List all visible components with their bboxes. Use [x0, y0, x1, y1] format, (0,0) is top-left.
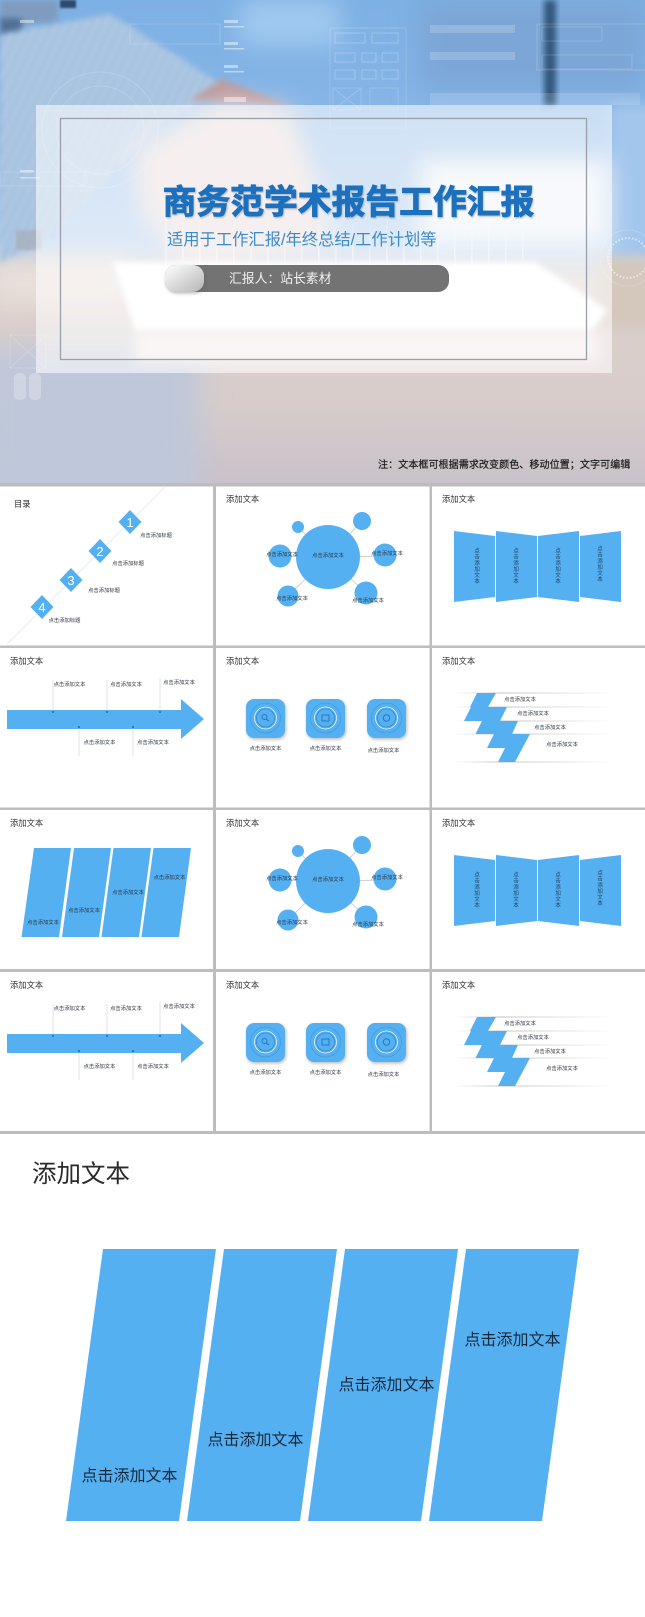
large columns	[66, 1249, 579, 1521]
panel: icon cards	[226, 656, 406, 754]
item 1	[118, 510, 173, 539]
panel: contents slide	[7, 487, 173, 644]
timeline labels: 点击添加文本	[163, 678, 196, 686]
zigzag labels: 点击添加文本	[517, 709, 550, 717]
heading: 添加文本	[442, 656, 475, 666]
zigzag labels: 点击添加文本	[546, 1064, 579, 1072]
bubble labels: 点击添加文本	[352, 920, 385, 928]
timeline labels: 点击添加文本	[110, 680, 143, 688]
zigzag labels	[504, 1019, 579, 1072]
bubble labels: 点击添加文本	[312, 551, 345, 559]
timeline labels	[54, 1002, 196, 1070]
card labels	[250, 744, 400, 754]
decorative tech labels	[14, 20, 640, 400]
heading: 目录	[14, 499, 31, 509]
connectors	[280, 521, 385, 596]
zigzag labels: 点击添加文本	[534, 723, 567, 731]
presenter pill	[165, 265, 449, 292]
fold labels: 点击添加文本	[512, 548, 519, 585]
zigzag labels: 点击添加文本	[517, 1033, 550, 1041]
fold labels: 点击添加文本	[473, 548, 480, 585]
large column labels	[81, 1331, 561, 1485]
large column labels: 点击添加文本	[81, 1467, 178, 1485]
heading: 添加文本	[32, 1160, 130, 1188]
item 3: 3	[67, 573, 75, 588]
diagonal line	[7, 487, 165, 644]
subtitle: 适用于工作汇报/年终总结/工作计划等	[167, 231, 437, 249]
arrow	[7, 699, 204, 739]
inner frame	[60, 118, 586, 360]
vertical light bars	[165, 234, 524, 261]
heading: 添加文本	[226, 656, 259, 666]
item 3: 点击添加标题	[88, 586, 121, 594]
panel: timeline arrow	[7, 656, 204, 756]
bubbles	[268, 836, 396, 930]
photo background	[0, 0, 645, 510]
card labels: 点击添加文本	[310, 744, 342, 752]
fold labels	[473, 870, 603, 909]
panel: folded banners repeat	[442, 818, 621, 926]
zigzag shape	[464, 693, 530, 762]
column labels: 点击添加文本	[112, 888, 145, 896]
footnote: 注：文本框可根据需求改变颜色、移动位置；文字可编辑	[378, 458, 630, 471]
panel: folded banners	[442, 494, 621, 602]
timeline labels: 点击添加文本	[54, 1004, 86, 1012]
decorative tech overlay	[0, 24, 645, 368]
fold labels: 点击添加文本	[596, 546, 603, 583]
panel: slanted columns small	[10, 818, 191, 937]
heading: 添加文本	[442, 818, 475, 828]
fold labels: 点击添加文本	[512, 872, 519, 909]
dots	[52, 711, 161, 728]
zigzag labels	[504, 695, 579, 748]
guide lines	[452, 692, 617, 762]
card labels	[250, 1068, 400, 1078]
card 2	[306, 1023, 345, 1062]
timeline labels: 点击添加文本	[163, 1002, 196, 1010]
panel: zigzag steps repeat	[442, 980, 617, 1086]
bubble labels: 点击添加文本	[266, 874, 299, 882]
item 4	[30, 595, 81, 624]
card 1	[246, 699, 285, 738]
large column labels: 点击添加文本	[207, 1431, 304, 1449]
bubble labels: 点击添加文本	[371, 873, 404, 881]
arrow	[7, 1023, 204, 1063]
column labels: 点击添加文本	[154, 873, 186, 881]
card labels: 点击添加文本	[250, 744, 282, 752]
large column labels: 点击添加文本	[464, 1331, 561, 1349]
panel: zigzag steps	[442, 656, 617, 762]
card labels: 点击添加文本	[310, 1068, 342, 1076]
timeline labels: 点击添加文本	[110, 1004, 143, 1012]
heading: 添加文本	[226, 818, 259, 828]
dots	[52, 1035, 161, 1052]
heading: 添加文本	[226, 980, 259, 990]
fold labels: 点击添加文本	[554, 872, 561, 909]
item 1: 点击添加标题	[140, 531, 173, 539]
fold labels: 点击添加文本	[554, 548, 561, 585]
columns	[22, 848, 191, 937]
bubble labels: 点击添加文本	[352, 596, 385, 604]
panel: large slanted columns slide	[32, 1160, 579, 1521]
panel: icon cards repeat	[226, 980, 406, 1078]
heading: 添加文本	[442, 980, 475, 990]
bubble labels: 点击添加文本	[266, 550, 299, 558]
item 2: 点击添加标题	[112, 559, 145, 567]
timeline labels: 点击添加文本	[137, 738, 170, 746]
presenter pill: 汇报人：站长素材	[229, 271, 332, 286]
timeline labels: 点击添加文本	[84, 738, 116, 746]
stems	[53, 1002, 160, 1080]
panel: bubble diagram	[226, 494, 404, 606]
heading: 添加文本	[442, 494, 475, 504]
zigzag labels: 点击添加文本	[534, 1047, 567, 1055]
bubble labels: 点击添加文本	[312, 875, 345, 883]
grid dividers	[0, 483, 645, 1134]
timeline labels: 点击添加文本	[137, 1062, 170, 1070]
bubble labels: 点击添加文本	[276, 594, 309, 602]
card labels: 点击添加文本	[368, 746, 400, 754]
bubbles	[268, 512, 396, 606]
fold panels	[454, 531, 621, 602]
item 3	[60, 568, 121, 594]
fold labels: 点击添加文本	[596, 870, 603, 907]
stems	[53, 678, 160, 756]
heading: 添加文本	[10, 980, 43, 990]
item 1: 1	[126, 515, 134, 530]
bubble labels: 点击添加文本	[276, 918, 309, 926]
zigzag labels: 点击添加文本	[504, 695, 537, 703]
card labels: 点击添加文本	[368, 1070, 400, 1078]
panel: bubble diagram repeat	[226, 818, 404, 930]
timeline labels: 点击添加文本	[84, 1062, 116, 1070]
card 3	[367, 1023, 406, 1062]
item 2: 2	[96, 544, 104, 559]
item 2	[88, 539, 145, 567]
title: 商务范学术报告工作汇报	[163, 184, 534, 222]
heading: 添加文本	[10, 656, 43, 666]
fold labels	[473, 546, 603, 585]
bubble labels: 点击添加文本	[371, 549, 404, 557]
translucent panel	[36, 105, 612, 373]
zigzag shape	[464, 1017, 530, 1086]
card 3	[367, 699, 406, 738]
bubble labels	[266, 873, 404, 928]
timeline labels	[54, 678, 196, 746]
panel: cover slide	[0, 0, 645, 510]
bubble labels	[266, 549, 404, 604]
column labels	[27, 873, 186, 926]
zigzag labels: 点击添加文本	[546, 740, 579, 748]
heading: 添加文本	[226, 494, 259, 504]
large column labels: 点击添加文本	[338, 1376, 435, 1394]
item 4: 点击添加标题	[49, 616, 81, 624]
item 4: 4	[38, 600, 46, 615]
timeline labels: 点击添加文本	[54, 680, 86, 688]
fold panels	[454, 855, 621, 926]
card 2	[306, 699, 345, 738]
card labels: 点击添加文本	[250, 1068, 282, 1076]
column labels: 点击添加文本	[68, 906, 101, 914]
zigzag labels: 点击添加文本	[504, 1019, 537, 1027]
heading: 添加文本	[10, 818, 43, 828]
card 1	[246, 1023, 285, 1062]
panel: timeline arrow repeat	[7, 980, 204, 1080]
fold labels: 点击添加文本	[473, 872, 480, 909]
column labels: 点击添加文本	[27, 918, 60, 926]
connectors	[280, 845, 385, 920]
guide lines	[452, 1016, 617, 1086]
